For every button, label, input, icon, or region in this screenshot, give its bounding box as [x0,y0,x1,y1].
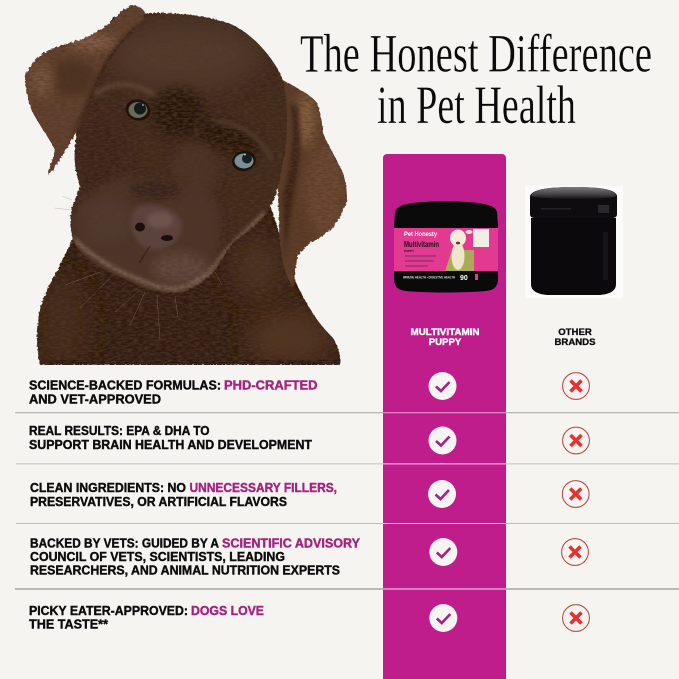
icon: cross row 2 [563,427,589,454]
text: backed by vets: RESEARCHERS, AND ANIMAL NUTRITION EXPERTS [30,564,340,578]
jar dog photo [445,230,474,271]
text: backed by vets: SCIENTIFIC ADVISORY [222,536,361,550]
jar natural badge [473,229,489,247]
label: multivitamin puppy: PUPPY [429,337,462,348]
image: chocolate labrador puppy [20,0,355,375]
text: picky eater-approved: DOGS LOVE [191,604,264,618]
label: multivitamin puppy: MULTIVITAMIN [410,327,480,338]
text: science-backed formulas: SCIENCE-BACKED FORMULAS: [29,378,221,392]
text: science-backed formulas: AND VET-APPROVED [29,392,161,406]
text: picky eater-approved [29,604,264,632]
text: clean ingredients [30,481,337,509]
text: picky eater-approved: THE TASTE** [29,618,108,632]
puppy body [36,206,341,365]
icon: check row 3 [428,480,456,508]
icon: check row 2 [428,426,456,454]
text: clean ingredients: CLEAN INGREDIENTS: NO [30,481,186,495]
text: real results [29,424,312,452]
text: real results: SUPPORT BRAIN HEALTH AND DEVELOPMENT [29,438,312,452]
product image: Pet Honesty Multivitamin Puppy jar: PUPPY [404,249,414,253]
title: in Pet Health [377,75,576,135]
icon: cross row 5 [563,605,589,631]
icon: cross row 1 [563,373,589,399]
jar label small lines [405,256,436,266]
text: real results: REAL RESULTS: EPA & DHA TO [29,424,210,438]
text: science-backed formulas: PHD-CRAFTED [224,378,318,392]
product image: Pet Honesty Multivitamin Puppy jar: IMMUNE HEALTH • DIGESTIVE HEALTH [403,276,455,280]
product image: Pet Honesty Multivitamin Puppy jar: Multivitamin [404,240,439,249]
label: other brands: BRANDS [554,337,596,348]
puppy right ear [277,80,348,286]
product image: generic black jar [525,186,623,298]
product image: Pet Honesty Multivitamin Puppy jar [394,201,498,292]
title [300,24,652,135]
text: clean ingredients: UNNECESSARY FILLERS, [190,481,337,495]
text: backed by vets: COUNCIL OF VETS, SCIENTISTS, LEADING [30,550,285,564]
panel: multivitamin puppy column [383,154,506,679]
puppy head [70,12,288,294]
icon: check row 5 [429,604,457,632]
product image: Pet Honesty Multivitamin Puppy jar: 90 [460,275,468,282]
icon: check row 4 [429,538,457,566]
icon: cross row 3 [562,481,589,507]
puppy right eye [232,151,256,172]
icon: check row 1 [428,372,456,400]
text: science-backed formulas [29,378,318,406]
puppy left eye [126,99,150,121]
product image: Pet Honesty Multivitamin Puppy jar: Pet Honesty [404,231,437,238]
puppy muzzle [72,177,219,293]
text: backed by vets: BACKED BY VETS: GUIDED BY A [30,536,219,550]
text: picky eater-approved: PICKY EATER-APPROVED: [29,604,188,618]
puppy nose [131,205,182,263]
text: clean ingredients: PRESERVATIVES, OR ARTIFICIAL FLAVORS [30,495,287,509]
puppy whiskers [55,196,222,340]
row dividers [15,413,679,589]
label: other brands: OTHER [558,327,592,338]
puppy left ear [24,5,146,176]
icon: cross row 4 [562,539,588,565]
text: backed by vets [30,536,361,578]
